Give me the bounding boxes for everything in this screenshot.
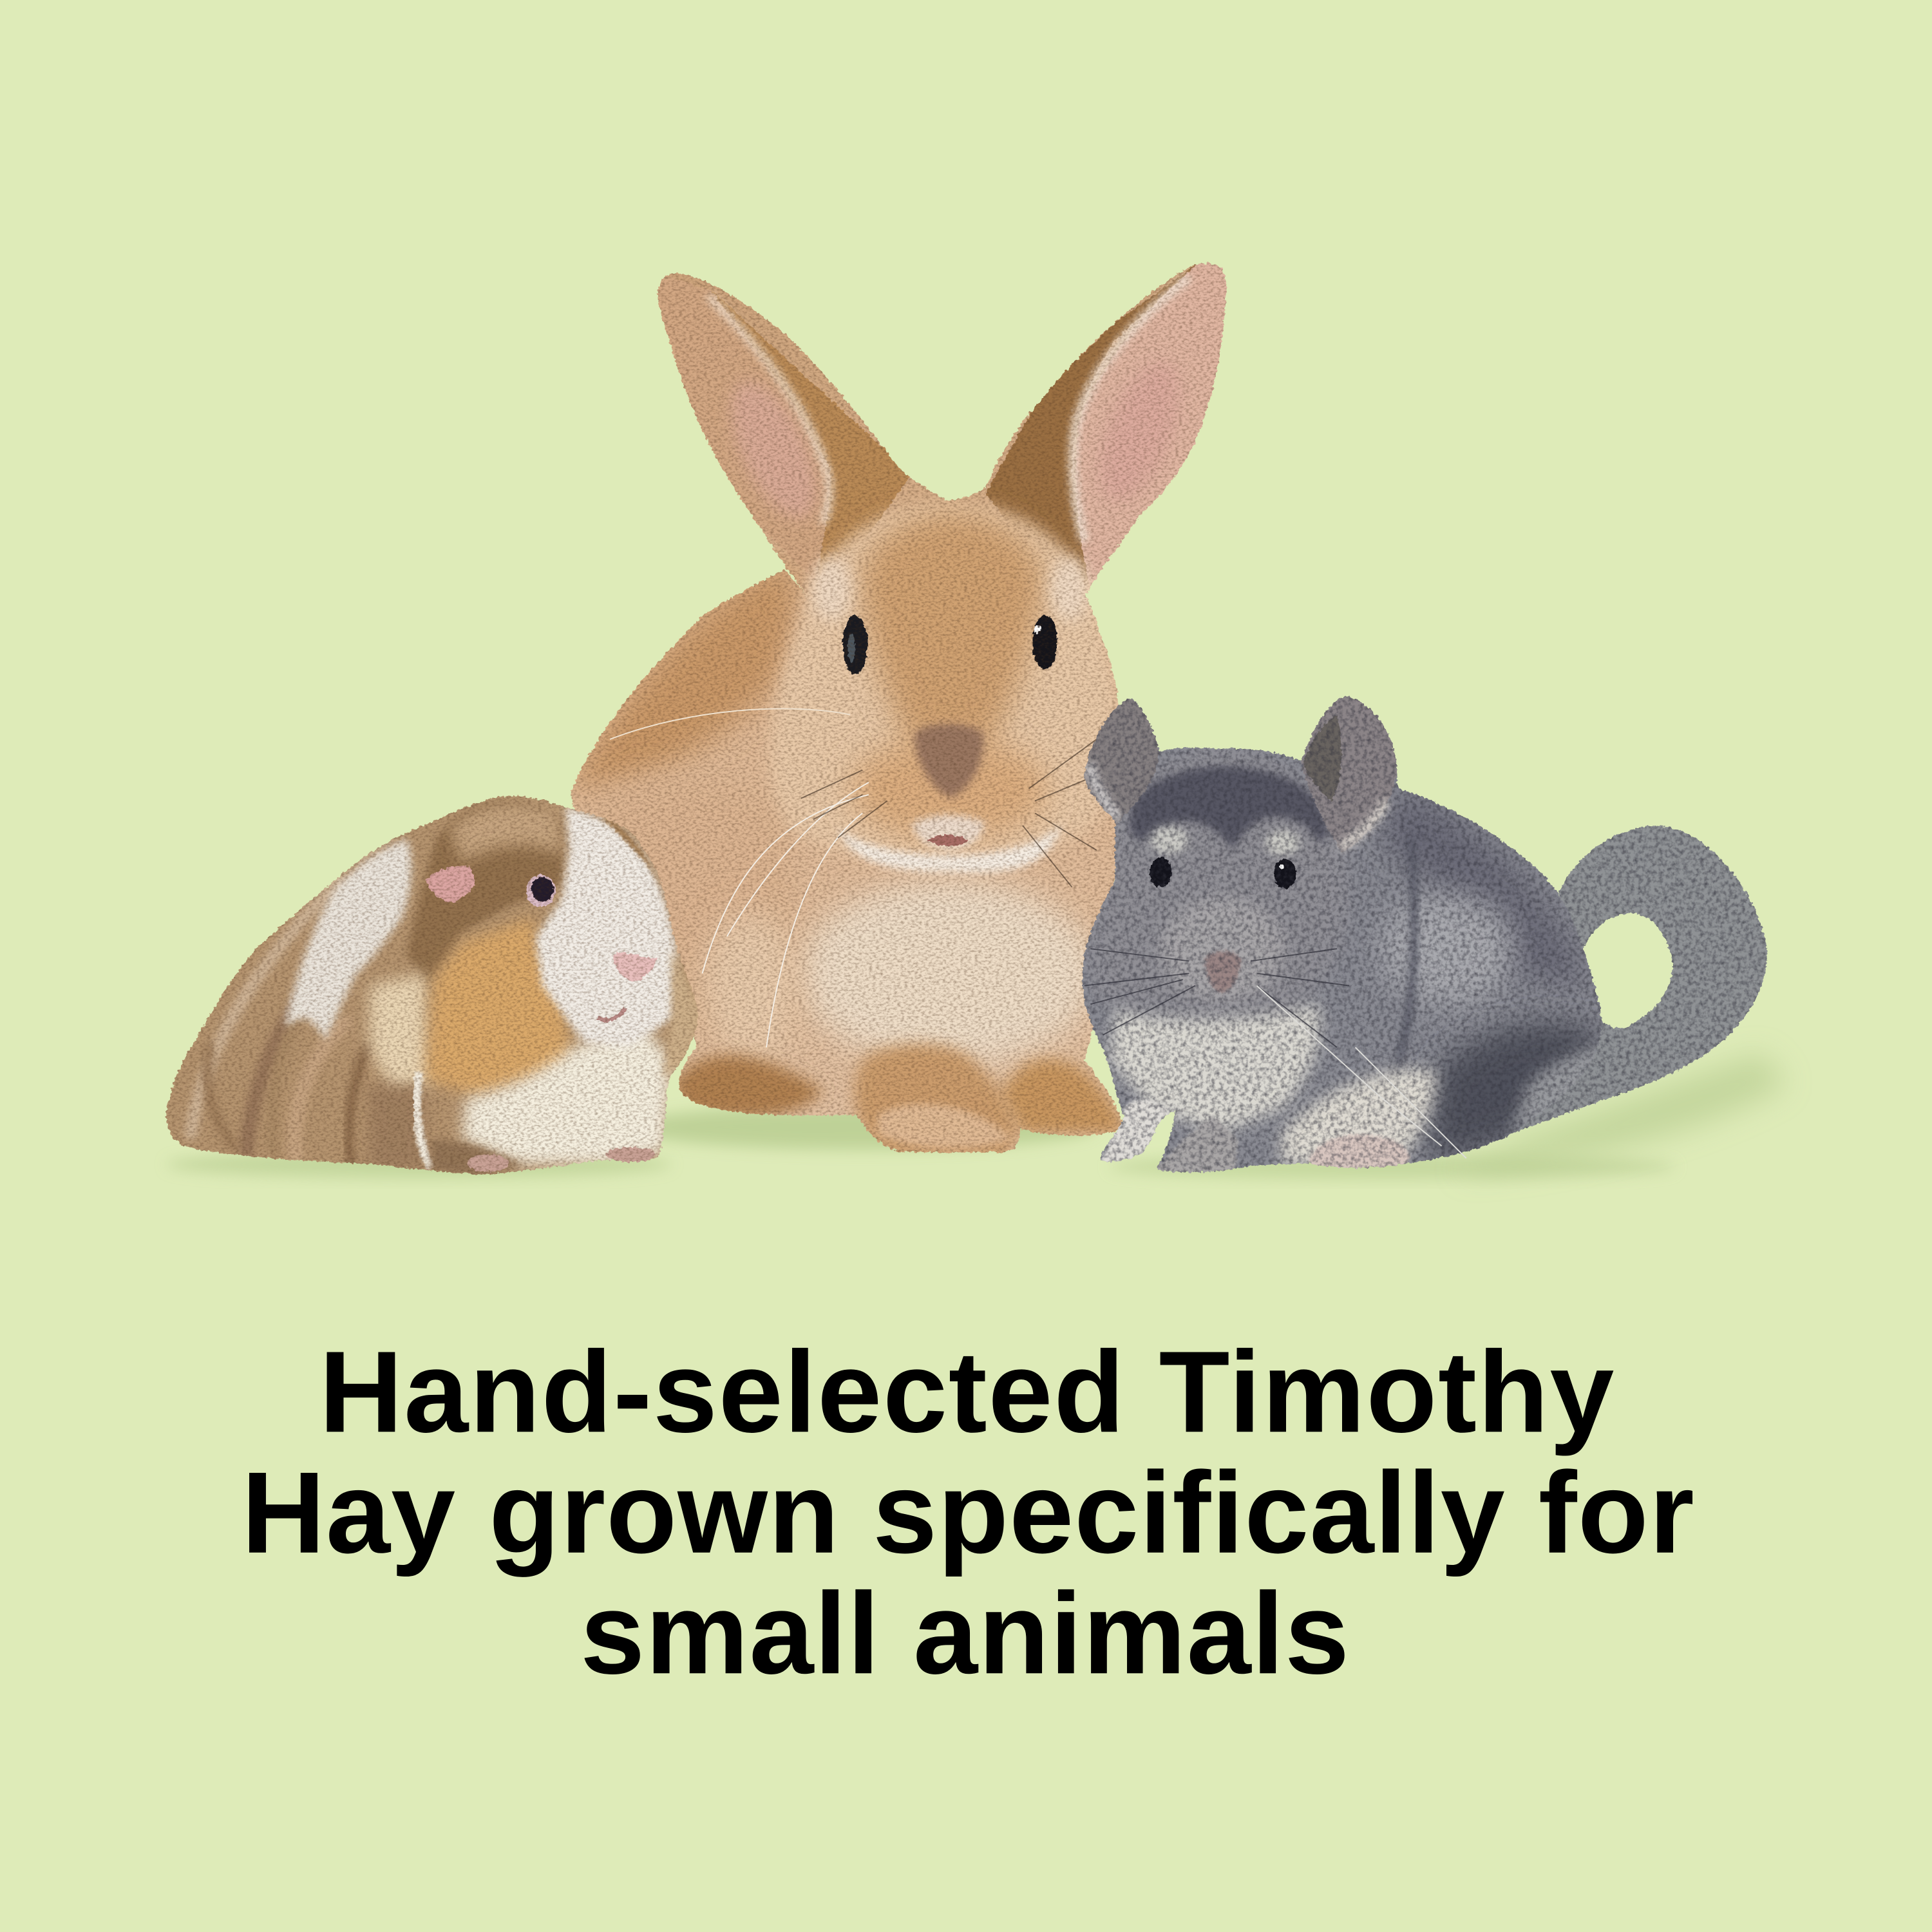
rabbit left belly shade [703, 912, 801, 1059]
guinea pig lower brown [367, 1084, 425, 1171]
rabbit body base [554, 247, 1244, 1171]
chinchilla rump dark [1429, 1023, 1602, 1164]
chinchilla right ear [1301, 696, 1397, 853]
rabbit left ear edge [708, 296, 829, 524]
guinea pig chin fur [663, 949, 705, 1078]
rabbit mouth [927, 835, 969, 846]
infographic canvas [165, 261, 1783, 1674]
chinchilla body base [1072, 684, 1614, 1177]
chinchilla hind foot [1309, 1135, 1409, 1171]
guinea pig white face [536, 807, 676, 1047]
chinchilla silhouette with interior painting [1072, 684, 1614, 1177]
chinchilla left ear [1084, 697, 1159, 826]
illustration: rabbit [554, 247, 1244, 1171]
rabbit eyes [843, 615, 1057, 674]
rabbit whiskers [610, 708, 1109, 1047]
chinchilla back dark [1380, 788, 1589, 986]
guinea pig nose [612, 953, 658, 981]
illustration: chinchilla [1072, 684, 1767, 1177]
chinchilla right foreleg [1152, 1115, 1238, 1173]
ground shadows [166, 1054, 1786, 1179]
rabbit flank light [603, 769, 783, 1037]
rabbit haunch [672, 1055, 823, 1118]
guinea pig lower shade [431, 1140, 524, 1177]
guinea pig back-of-head brown [601, 816, 661, 887]
rabbit head base [770, 503, 1119, 864]
chinchilla muzzle [1160, 897, 1284, 1001]
rabbit chin band [838, 823, 1062, 873]
guinea pig head brown [406, 800, 565, 986]
chinchilla whiskers [1084, 949, 1466, 1158]
rabbit muzzle [850, 737, 1047, 840]
headline text [242, 1327, 1694, 1698]
rabbit front leg right [1001, 1059, 1128, 1133]
headline text: small animals [580, 1569, 1349, 1698]
guinea pig tan strip [370, 973, 431, 1097]
guinea pig mouth [598, 1008, 626, 1020]
chinchilla right ear light base [1341, 801, 1386, 848]
chinchilla rear lighter [1510, 1041, 1614, 1140]
chinchilla lower belly [1282, 1069, 1435, 1164]
chinchilla left foreleg [1101, 1099, 1171, 1164]
guinea pig rump streaks [191, 881, 367, 1164]
guinea pig silhouette with interior painting [154, 788, 708, 1183]
rabbit left ear pink [730, 382, 818, 518]
chinchilla chest [1109, 1004, 1320, 1133]
rabbit chest [801, 881, 1097, 1066]
chinchilla brows [1151, 827, 1300, 855]
rabbit left ear back flap [711, 290, 912, 579]
rabbit lips [912, 815, 986, 850]
guinea pig ear [425, 866, 475, 902]
rabbit nose [914, 724, 983, 799]
rabbit right ear edge [1073, 277, 1189, 542]
rabbit right ear back flap [986, 261, 1201, 591]
rabbit toes [877, 1104, 1013, 1148]
rabbit back shading [569, 561, 793, 791]
guinea pig base coat [154, 788, 708, 1183]
rabbit silhouette with interior painting [554, 247, 1244, 1171]
guinea pig crown tan [450, 802, 564, 862]
guinea pig feet [467, 1147, 656, 1172]
chinchilla head [1084, 749, 1349, 1023]
rabbit eye patches [812, 557, 1089, 621]
illustration: guinea pig [154, 788, 708, 1183]
rabbit right ear pink [1083, 351, 1197, 512]
headline text: Hand-selected Timothy [319, 1327, 1614, 1457]
chinchilla flank stripes [1392, 838, 1414, 1084]
guinea pig white streak [285, 839, 412, 1040]
rabbit front leg left [854, 1043, 1017, 1158]
guinea pig orange patch [425, 918, 573, 1097]
chinchilla eyes [1150, 858, 1296, 888]
chinchilla tail [1512, 826, 1767, 1133]
chinchilla left ear light fringe [1089, 764, 1119, 819]
chinchilla flank light [1380, 893, 1515, 1004]
chinchilla nose [1205, 951, 1241, 993]
rabbit left ear inner [653, 271, 831, 579]
rabbit right ear inner [1075, 261, 1232, 591]
guinea pig bib [462, 1023, 672, 1164]
rabbit forehead blaze [860, 511, 1045, 752]
guinea pig belly streak [417, 1072, 431, 1168]
headline text: Hay grown specifically for [242, 1448, 1694, 1578]
chinchilla right ear dark inner [1303, 715, 1341, 801]
chinchilla crown [1130, 766, 1327, 850]
guinea pig eye [526, 875, 556, 907]
